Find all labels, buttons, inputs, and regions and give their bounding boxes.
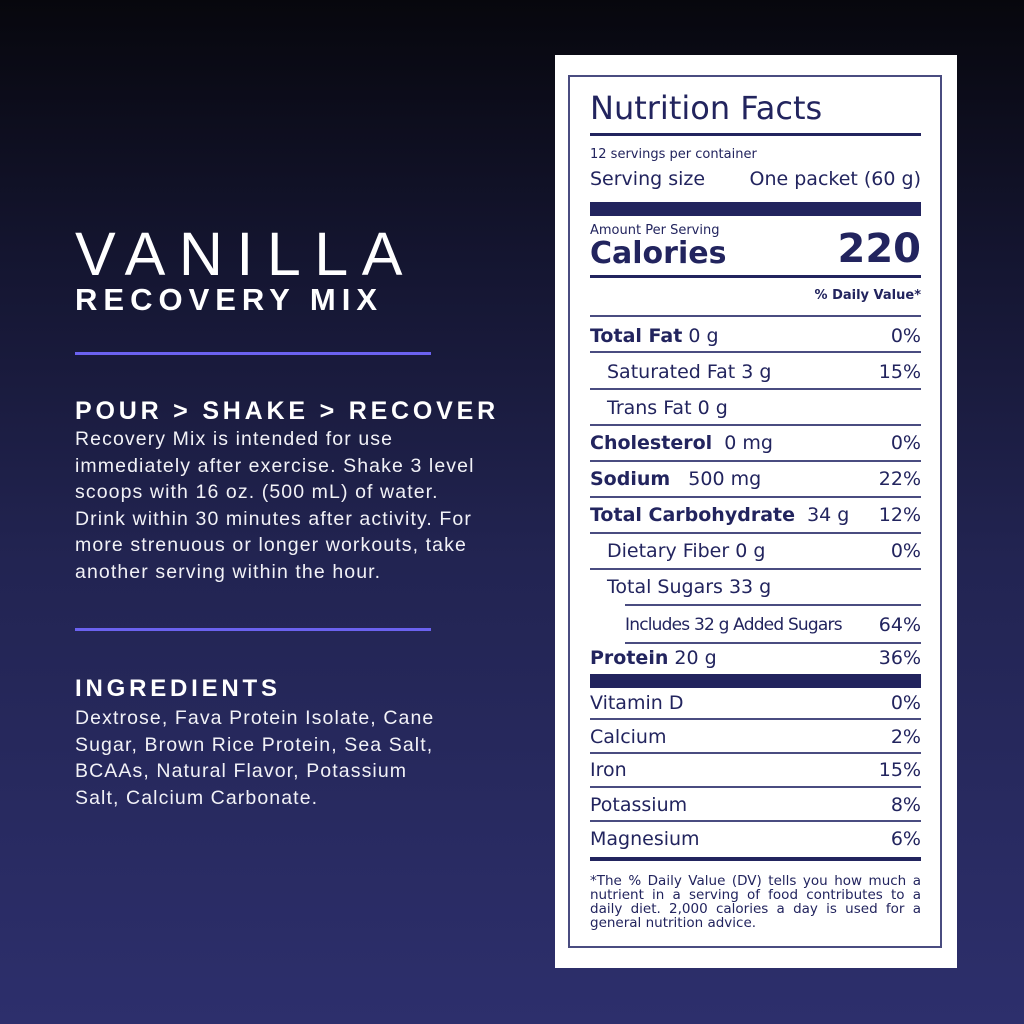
subtitle: recovery mix: RECOVERY MIX	[75, 282, 383, 317]
text: 0%	[891, 540, 921, 562]
text: 2%	[891, 726, 921, 748]
text: % Daily Value*	[815, 288, 921, 303]
text block: instructions: Recovery Mix is intended for use	[75, 428, 393, 450]
servings: 12 servings per container	[590, 147, 757, 162]
text: 6%	[891, 828, 921, 850]
text block: ingredients: BCAAs, Natural Flavor, Potassium	[75, 760, 407, 782]
text: Serving size	[590, 168, 705, 190]
nutrient rows: 0%	[891, 325, 921, 347]
title: vanilla: VANILLA	[75, 220, 416, 288]
vitamins and minerals: Vitamin D	[590, 692, 683, 714]
text: Cholesterol 0 mg	[590, 432, 773, 454]
text: 22%	[879, 468, 921, 490]
heading: nutrition facts: Nutrition Facts	[590, 89, 822, 127]
text block: ingredients: Salt, Calcium Carbonate.	[75, 787, 318, 809]
text block: ingredients	[75, 707, 434, 809]
text block: instructions: another serving within the hour.	[75, 561, 381, 583]
heading: pour shake recover: POUR > SHAKE > RECOVER	[75, 397, 499, 425]
text: Dietary Fiber 0 g	[607, 540, 765, 562]
text block: instructions: more strenuous or longer workouts, take	[75, 534, 467, 556]
text: Sodium 500 mg	[590, 468, 761, 490]
text: 15%	[879, 759, 921, 781]
nutrient rows: Total Fat 0 g	[590, 325, 719, 347]
text: Potassium	[590, 794, 687, 816]
text: 220	[838, 226, 921, 272]
vitamins and minerals: 0%	[891, 692, 921, 714]
text: 0%	[891, 432, 921, 454]
text: 64%	[879, 614, 921, 636]
text block: instructions	[75, 428, 475, 583]
text: Total Sugars 33 g	[607, 576, 771, 598]
text: 12%	[879, 504, 921, 526]
text block: ingredients: Sugar, Brown Rice Protein, Sea Salt,	[75, 734, 433, 756]
text block: ingredients: Dextrose, Fava Protein Isolate, Cane	[75, 707, 434, 729]
text: Total Carbohydrate 34 g	[590, 504, 849, 526]
text block: instructions: Drink within 30 minutes after activity. For	[75, 508, 472, 530]
vitamins and minerals	[590, 692, 921, 714]
text: 36%	[879, 647, 921, 669]
text: Trans Fat 0 g	[607, 397, 728, 419]
text block: instructions: immediately after exercise. Shake 3 level	[75, 455, 475, 477]
footnote: *The % Daily Value (DV) tells you how much a nutrient in a serving of food contributes to a daily diet. 2,000 calories a day is used for a general nutrition advice.	[590, 873, 921, 931]
text block: instructions: scoops with 16 oz. (500 mL) of water.	[75, 481, 439, 503]
text: 15%	[879, 361, 921, 383]
nutrient rows	[590, 325, 921, 347]
text: One packet (60 g)	[750, 168, 921, 190]
text: Includes 32 g Added Sugars	[625, 615, 842, 635]
heading: ingredients: INGREDIENTS	[75, 675, 281, 702]
text: Magnesium	[590, 828, 700, 850]
panel: nutrition facts label	[555, 55, 957, 968]
text: Calories	[590, 236, 726, 271]
text: Calcium	[590, 726, 666, 748]
text: Saturated Fat 3 g	[607, 361, 771, 383]
text: Iron	[590, 759, 627, 781]
text: 8%	[891, 794, 921, 816]
calories: Amount Per Serving	[590, 223, 719, 238]
text: Protein 20 g	[590, 647, 717, 669]
